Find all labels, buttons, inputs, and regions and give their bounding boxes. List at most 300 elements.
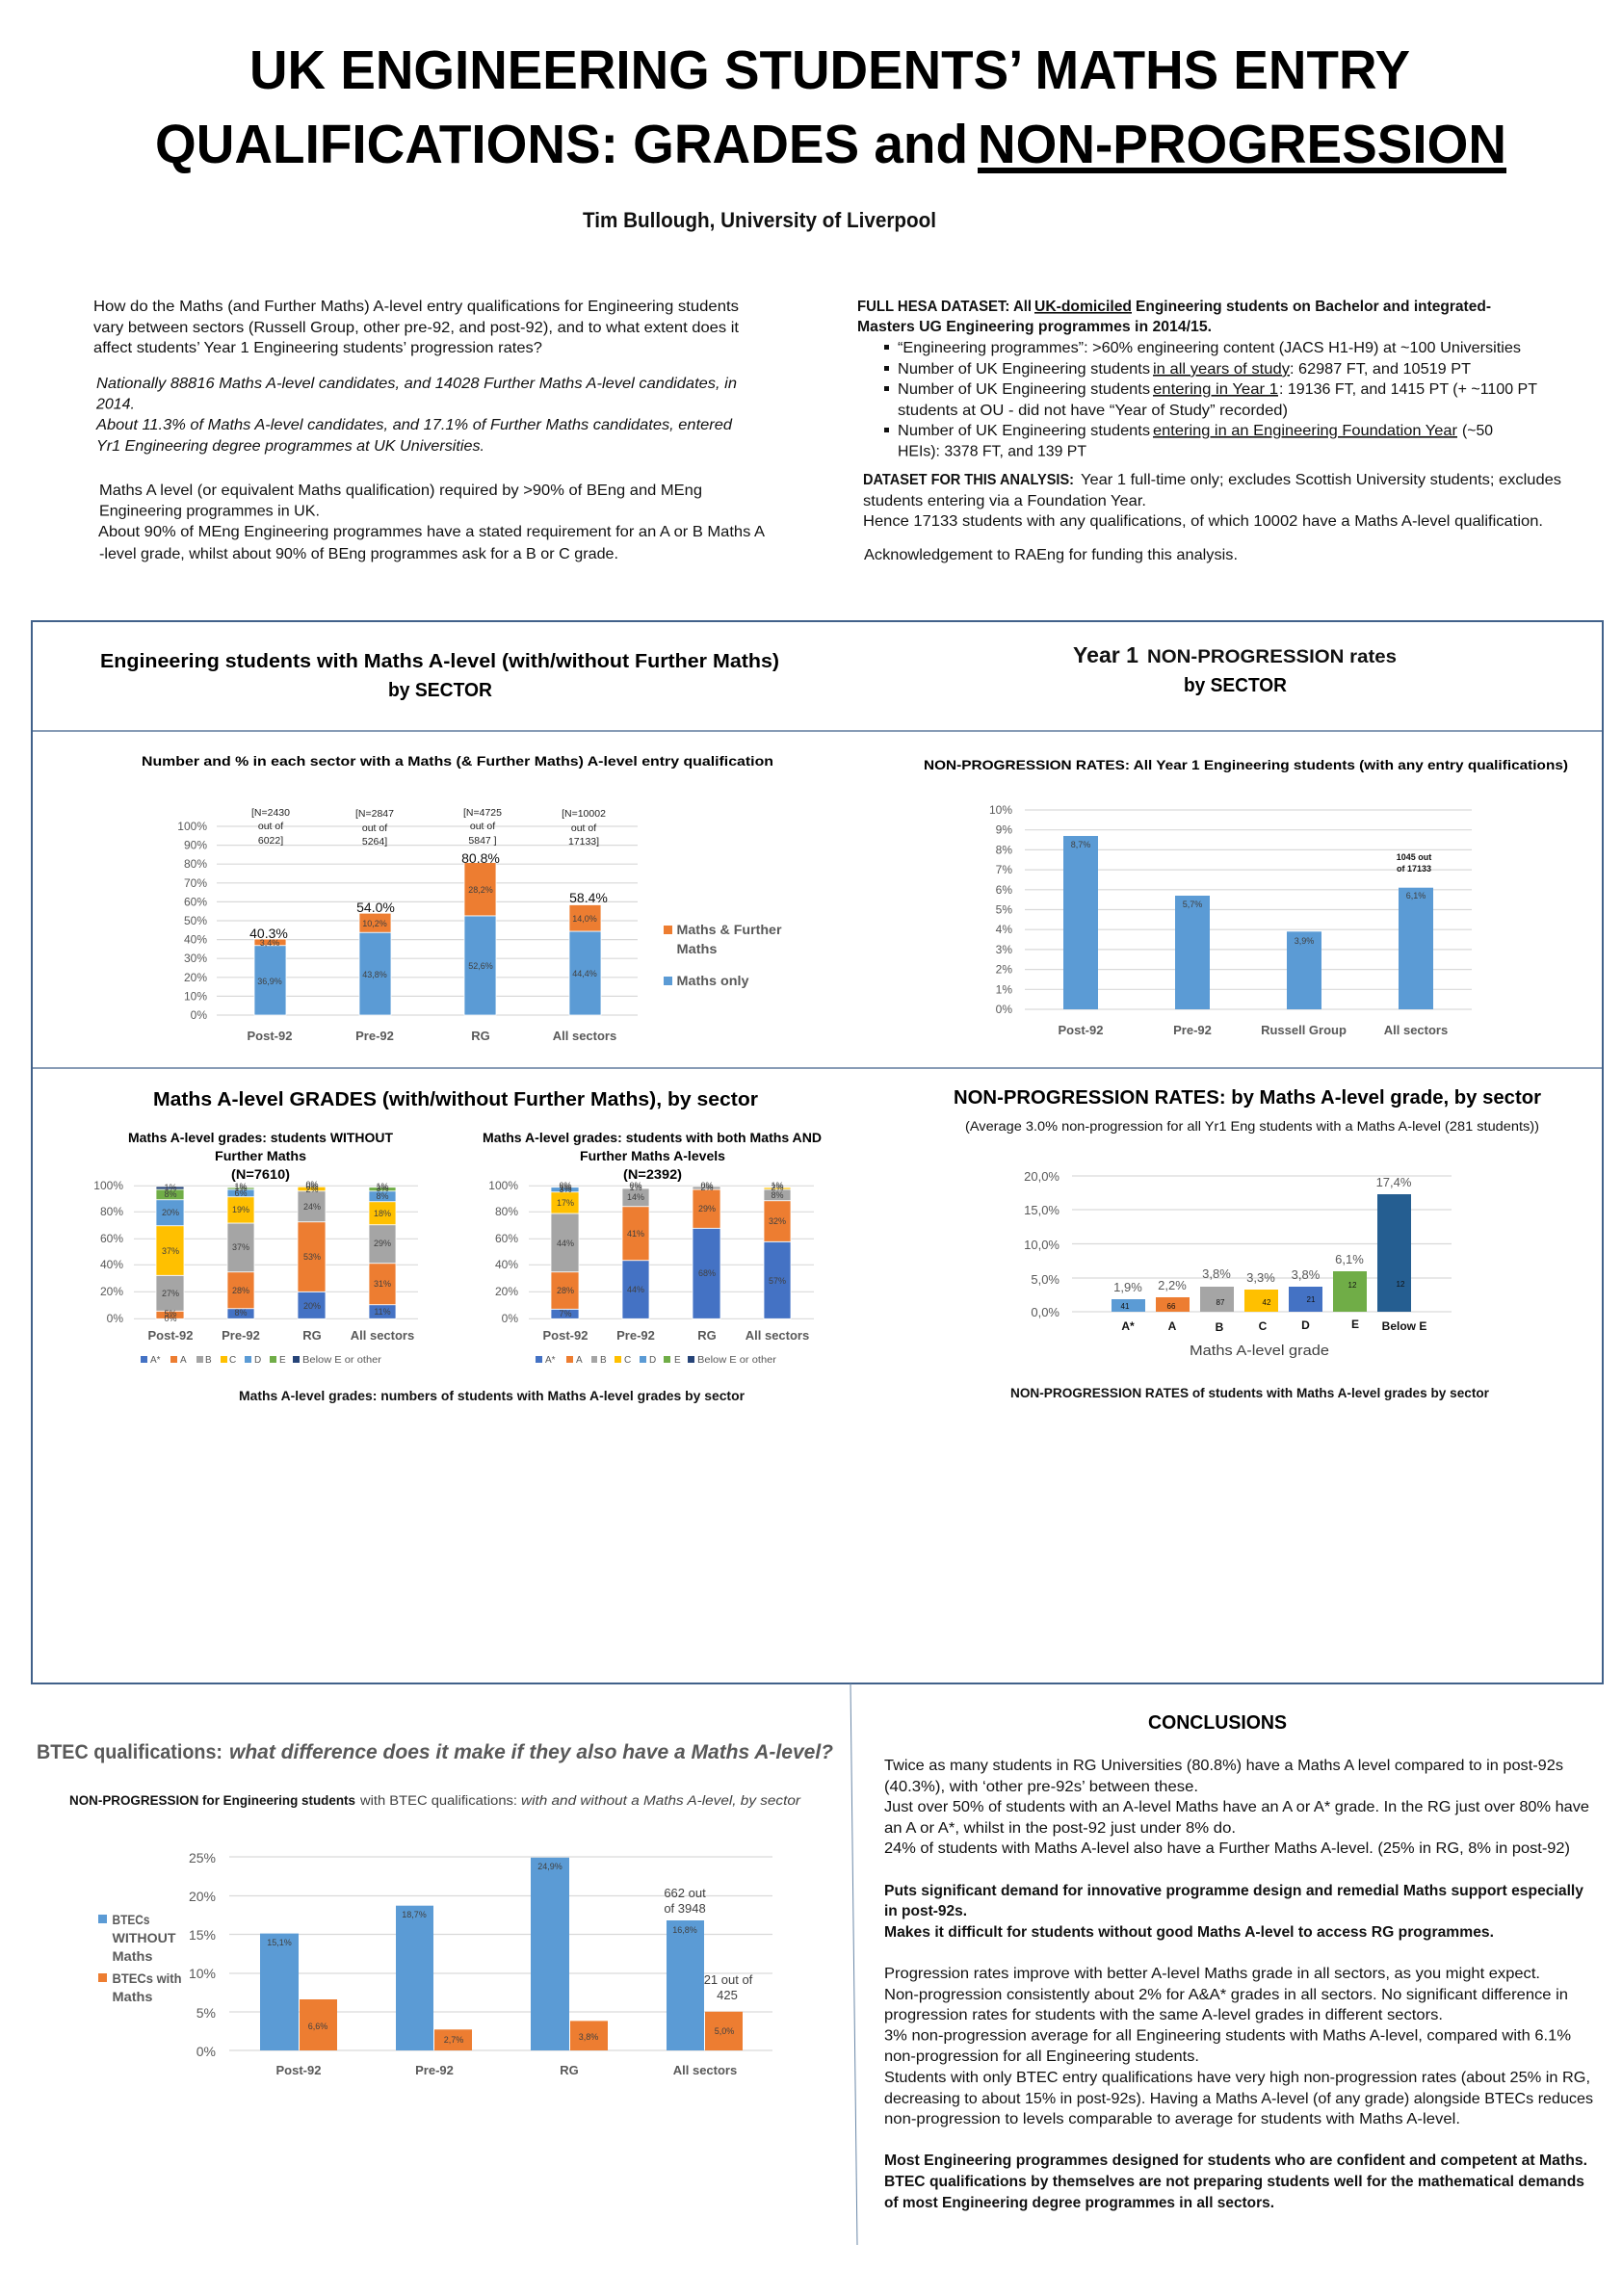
chart: percentage with Maths A-level by sector: 17133] [568,836,599,848]
heading: non-progression by sector: Year 1 [1073,642,1138,667]
chart: grades with Further Maths: 44% [557,1239,574,1248]
chart: non-progression rates by sector: 6,1% [1406,891,1426,900]
chart: percentage with Maths A-level by sector: 28,2% [468,885,493,895]
chart: non-progression by grade: 42 [1263,1298,1271,1307]
chart: grades with Further Maths: 8% [771,1190,784,1200]
text block: research question: How do the Maths (and Further Maths) A-level entry qualifications for Engineering students [93,299,739,315]
chart: percentage with Maths A-level by sector: [N=10002 [562,808,606,820]
chart: grades without Further Maths: 1% [164,1183,177,1192]
chart: grades without Further Maths: All sectors [351,1328,414,1343]
chart: grades without Further Maths: 100% [93,1179,123,1192]
chart: grades without Further Maths: 29% [374,1239,391,1248]
legend: BTEC: Maths [112,1949,152,1964]
chart: percentage with Maths A-level by sector: 43,8% [362,970,387,979]
legend: BTEC: WITHOUT [112,1931,176,1945]
chart: non-progression by grade: C [1259,1319,1268,1333]
legend: Maths only [676,974,749,988]
chart title: students without Further Maths: Further Maths [215,1148,306,1163]
text block: progression findings: Students with only BTEC entry qualifications have very high non-progression rates (about 25% in RG, [884,2070,1590,2086]
chart: percentage with Maths A-level by sector: 54.0% [356,900,395,915]
chart: percentage with Maths A-level by sector: 60% [184,895,207,908]
chart: percentage with Maths A-level by sector: 58.4% [569,890,608,905]
legend: grades, Further Maths chart: B [600,1355,607,1366]
chart: non-progression by grade: Maths A-level grade [1190,1343,1329,1359]
chart: grades with Further Maths: Pre-92 [616,1328,655,1343]
text block: progression findings: 3% non-progression average for all Engineering students with Maths A-level, compared with 6.1% [884,2028,1571,2044]
text block: final message: of most Engineering degree programmes in all sectors. [884,2195,1274,2211]
chart: non-progression by grade: 3,8% [1202,1266,1231,1281]
chart: BTEC non-progression by sector: 3,8% [579,2032,598,2042]
callout: 662 out of 3948: of 3948 [664,1901,706,1916]
chart heading: BTEC non-progression [69,1793,801,1808]
chart: non-progression by grade: 41 [1121,1302,1130,1311]
text block: sector findings: (40.3%), with ‘other pre-92s’ between these. [884,1779,1198,1795]
chart: percentage with Maths A-level by sector: 30% [184,952,207,965]
chart: non-progression by grade: B [1216,1320,1224,1334]
chart: percentage with Maths A-level by sector: 40% [184,933,207,947]
chart: non-progression by grade: 3,3% [1246,1270,1275,1285]
legend: BTEC: BTECs [112,1913,150,1927]
chart: grades with Further Maths: 60% [495,1232,518,1245]
text block: entry requirements: Maths A level (or equivalent Maths qualification) required by >90% of BEng and MEng [99,483,702,499]
chart: percentage with Maths A-level by sector: 70% [184,876,207,890]
chart: BTEC non-progression by sector: All sectors [673,2063,737,2077]
text block: research question: affect students’ Year 1 Engineering students’ progression rates? [93,340,542,356]
chart: non-progression rates by sector: 3,9% [1295,936,1314,946]
chart: grades without Further Maths: 3% [376,1184,389,1193]
chart: grades without Further Maths: 20% [303,1301,321,1311]
callout: 662 out of 3948: 662 out [664,1886,706,1900]
heading: students by sector [100,651,779,701]
chart heading: number and %: Number and % in each sector with a Maths (& Further Maths) A-level entry qualification [142,753,773,769]
chart: grades without Further Maths: 40% [100,1258,123,1271]
chart: percentage with Maths A-level by sector: out of [470,821,495,832]
legend: grades, Further Maths chart: C [624,1355,631,1366]
text block: full HESA dataset: Engineering students on Bachelor and integrated- [1136,299,1491,315]
chart: grades with Further Maths: Post-92 [543,1328,588,1343]
caption: non-progression by grade and sector: NON-PROGRESSION RATES of students with Maths A-level grades by sector [1010,1386,1490,1400]
chart: grades without Further Maths: 53% [303,1252,321,1262]
panel: conclusions [884,1712,1593,2211]
heading: students by sector: Engineering students with Maths A-level (with/without Further Maths) [100,651,779,672]
text block: dataset for this analysis: Hence 17133 students with any qualifications, of which 10002 have a Maths A-level qualification. [863,513,1543,530]
chart: grades with Further Maths: 41% [627,1229,644,1239]
text block: full HESA dataset: (~50 [1462,423,1493,439]
text block: research question [93,299,740,356]
chart: grades with Further Maths: 2% [771,1183,784,1192]
chart: grades without Further Maths: 8% [164,1189,177,1199]
callout: 21 out of 425: 425 [717,1988,738,2002]
text block: full HESA dataset [857,299,1537,460]
chart heading: all year 1 non-progression: NON-PROGRESSION RATES: All Year 1 Engineering students (with any entry qualifications) [924,757,1568,772]
chart: grades without Further Maths: Post-92 [148,1328,193,1343]
legend: grades: D [254,1355,261,1366]
heading: non-progression by grade: NON-PROGRESSION RATES: by Maths A-level grade, by sector [954,1087,1541,1109]
legend: BTEC: Maths [112,1990,152,2004]
chart title: students with Further Maths: (N=2392) [623,1166,682,1182]
chart: percentage with Maths A-level by sector: 6022] [258,835,283,847]
chart: grades without Further Maths: 11% [374,1307,391,1317]
text block: progression findings: progression rates for students with the same A-level grades in different sectors. [884,2007,1443,2023]
chart title: students with Further Maths: Further Maths A-levels [580,1148,725,1163]
chart: grades with Further Maths: 14% [627,1192,644,1202]
chart: grades with Further Maths: 17% [557,1198,574,1208]
heading: BTEC qualifications: what difference does it make if they also have a Maths A-level? [229,1741,833,1763]
chart: grades without Further Maths: 28% [232,1286,249,1295]
chart: percentage with Maths A-level by sector: 90% [184,839,207,852]
chart: percentage with Maths A-level by sector: 20% [184,971,207,984]
legend: Maths & Further [676,923,782,937]
legend: grades: Below E or other [302,1355,382,1366]
chart: percentage with Maths A-level by sector: 5264] [362,836,387,848]
caption: numbers of students: Maths A-level grades: numbers of students with Maths A-level grades by sector [239,1389,746,1403]
chart: non-progression rates by sector [989,803,1472,1037]
chart: grades without Further Maths: 80% [100,1205,123,1218]
text block: entry requirements [98,483,765,562]
author: Tim Bullough, University of Liverpool [583,208,936,232]
chart: grades without Further Maths: 31% [374,1279,391,1289]
chart: grades without Further Maths [93,1179,418,1366]
chart: grades with Further Maths: 3% [559,1185,572,1194]
panel frame: Maths A-level and non-progression charts [32,621,1603,1683]
chart: grades without Further Maths: 37% [232,1242,249,1252]
chart: grades without Further Maths: 18% [374,1209,391,1218]
chart: percentage with Maths A-level by sector: RG [471,1029,490,1043]
chart title: students without Further Maths: Maths A-level grades: students WITHOUT [128,1130,393,1145]
chart: non-progression by grade: 66 [1167,1302,1176,1311]
chart: grades with Further Maths: RG [697,1328,717,1343]
chart: percentage with Maths A-level by sector: 10,2% [362,919,387,928]
chart: grades with Further Maths: 68% [698,1268,716,1278]
chart: percentage with Maths A-level by sector: out of [258,821,283,832]
legend: grades, Further Maths chart: A [576,1355,583,1366]
chart: percentage with Maths A-level by sector: [N=2847 [355,808,394,820]
heading: students by sector: by SECTOR [388,680,493,701]
chart: BTEC non-progression by sector: RG [560,2063,579,2077]
chart: non-progression by grade: 1,9% [1113,1280,1142,1294]
chart: percentage with Maths A-level by sector: 36,9% [257,977,282,986]
chart: grades without Further Maths: 8% [376,1191,389,1201]
chart: non-progression by grade: 17,4% [1376,1175,1412,1189]
chart: grades with Further Maths: 0% [629,1181,642,1190]
chart: non-progression by grade: 21 [1307,1295,1316,1304]
chart: grades without Further Maths: 5% [164,1309,177,1318]
chart: BTEC non-progression by sector: 5,0% [715,2026,734,2036]
title: NON-PROGRESSION [978,114,1506,175]
chart: non-progression rates by sector: 7% [996,863,1012,876]
chart: percentage with Maths A-level by sector: 5847 ] [468,835,497,847]
chart: BTEC non-progression by sector: 15,1% [267,1938,292,1947]
text block: progression findings: non-progression for all Engineering students. [884,2048,1199,2065]
chart: grades with Further Maths: 0% [502,1312,518,1325]
chart: grades with Further Maths: 80% [495,1205,518,1218]
legend [664,923,782,988]
text block: full HESA dataset: Number of UK Engineering students [898,361,1150,378]
chart: BTEC non-progression by sector: 10% [189,1966,216,1981]
text block: full HESA dataset: Masters UG Engineering programmes in 2014/15. [857,319,1212,335]
text block: national candidates: 2014. [95,397,135,412]
chart: non-progression rates by sector: Russell Group [1261,1023,1347,1037]
chart: grades with Further Maths: 40% [495,1258,518,1271]
chart: grades with Further Maths [488,1179,814,1366]
chart: non-progression rates by sector: 0% [996,1003,1012,1016]
chart: non-progression rates by sector: 8,7% [1071,840,1090,849]
chart: non-progression by grade: Below E [1382,1319,1426,1333]
text block: entry requirements: About 90% of MEng Engineering programmes have a stated requirement for an A or B Maths A [98,524,765,540]
text block: full HESA dataset: “Engineering programmes”: >60% engineering content (JACS H1-H9) at ~100 Universities [898,340,1521,356]
chart: grades with Further Maths: 1% [629,1183,642,1192]
chart: BTEC non-progression by sector: 20% [189,1889,216,1904]
chart: non-progression by grade: 10,0% [1024,1238,1060,1252]
chart: non-progression by grade: E [1351,1318,1359,1331]
heading: BTEC qualifications: BTEC qualifications: [37,1741,222,1763]
chart: percentage with Maths A-level by sector: [N=2430 [251,807,290,819]
chart: BTEC non-progression by sector: 5% [196,2005,216,2021]
text block: national candidates: Yr1 Engineering degree programmes at UK Universities. [96,438,484,455]
text block: research question: vary between sectors (Russell Group, other pre-92, and post-92), and to what extent does it [93,320,740,336]
chart: percentage with Maths A-level by sector: out of [571,822,596,834]
chart: grades with Further Maths: 0% [700,1181,714,1190]
chart title: students with Further Maths: Maths A-level grades: students with both Maths AND [483,1130,822,1145]
text block: entry requirements: Engineering programmes in UK. [99,503,320,520]
text block: progression findings [884,1966,1593,2127]
chart: non-progression by grade: 12 [1397,1280,1405,1289]
chart: grades with Further Maths: 100% [488,1179,518,1192]
chart: grades with Further Maths: 7% [559,1309,572,1318]
chart: non-progression by grade: 20,0% [1024,1169,1060,1184]
chart: grades without Further Maths: 37% [162,1246,179,1256]
chart heading: BTEC non-progression: with and without a Maths A-level, by sector [521,1793,801,1808]
text block: progression findings: decreasing to about 15% in post-92s). Having a Maths A-level (of any grade) alongside BTECs reduces [884,2091,1593,2107]
chart: grades without Further Maths: 2% [305,1185,319,1194]
chart: grades with Further Maths: 0% [559,1181,572,1190]
text block: full HESA dataset: entering in an Engineering Foundation Year [1153,423,1458,439]
chart: BTEC non-progression by sector: 25% [189,1850,216,1866]
chart: non-progression by grade: 15,0% [1024,1203,1060,1217]
text block: sector findings: Just over 50% of students with an A-level Maths have an A or A* grade. In the RG just over 80% have [884,1799,1589,1815]
heading: conclusions: CONCLUSIONS [1148,1712,1287,1734]
chart: non-progression by grade: A [1168,1319,1177,1333]
chart: non-progression rates by sector: All sectors [1384,1023,1448,1037]
chart: grades without Further Maths: 0% [305,1180,319,1189]
callout: 662 out of 3948 [664,1886,706,1916]
chart: non-progression by grade: 5,0% [1031,1272,1060,1287]
chart: percentage with Maths A-level by sector: 80.8% [461,850,500,866]
chart: grades without Further Maths: 27% [162,1289,179,1298]
chart: non-progression by grade: A* [1121,1319,1135,1333]
text block: progression findings: Non-progression consistently about 2% for A&A* grades in all sectors. No significant difference in [884,1987,1568,2003]
chart: non-progression by grade: 12 [1348,1281,1357,1290]
text block: progression findings: Progression rates improve with better A-level Maths grade in all sectors, as you might expect. [884,1966,1540,1982]
text block: full HESA dataset: Number of UK Engineering students [898,423,1150,439]
chart: percentage with Maths A-level by sector: All sectors [553,1029,616,1043]
chart: percentage with Maths A-level by sector: 0% [191,1008,207,1022]
chart: grades without Further Maths: 20% [100,1285,123,1298]
chart: grades with Further Maths: 29% [698,1204,716,1213]
text block: full HESA dataset: FULL HESA DATASET: All [857,299,1032,315]
text block: dataset for this analysis: Year 1 full-time only; excludes Scottish University students; excludes [1081,472,1561,488]
chart: grades with Further Maths: 1% [771,1181,784,1190]
chart: grades with Further Maths: 1% [559,1183,572,1192]
chart: non-progression rates by sector: Pre-92 [1173,1023,1212,1037]
chart: grades with Further Maths: All sectors [746,1328,809,1343]
chart: grades with Further Maths: 44% [627,1285,644,1294]
chart: non-progression by grade: D [1301,1318,1310,1332]
chart: grades with Further Maths: 28% [557,1286,574,1295]
text block: dataset for this analysis: students entering via a Foundation Year. [863,493,1146,509]
text block: sector findings: Twice as many students in RG Universities (80.8%) have a Maths A level compared to in post-92s [884,1758,1563,1774]
chart: percentage with Maths A-level by sector: 80% [184,857,207,871]
text block: sector findings: an A or A*, whilst in the post-92 just under 8% do. [884,1820,1236,1837]
text block: full HESA dataset: entering in Year 1 [1153,381,1278,398]
callout: 1045 out of 17133 [1397,852,1431,874]
chart: non-progression rates by sector: 1% [996,982,1012,996]
chart: grades without Further Maths: 24% [303,1202,321,1212]
chart: BTEC non-progression by sector: Post-92 [276,2063,321,2077]
chart: non-progression by grade: 6,1% [1335,1252,1364,1266]
chart: non-progression by grade [1024,1169,1452,1359]
text block: entry requirements: -level grade, whilst about 90% of BEng programmes ask for a B or C grade. [99,546,618,562]
legend: BTEC [98,1913,181,2004]
chart: percentage with Maths A-level by sector: 52,6% [468,961,493,971]
legend: grades [141,1355,382,1366]
acknowledgement: Acknowledgement to RAEng for funding this analysis. [864,547,1238,563]
text block: national candidates [95,376,737,455]
chart: BTEC non-progression by sector [98,1850,772,2077]
chart: percentage with Maths A-level by sector: 50% [184,914,207,927]
chart heading: BTEC non-progression: NON-PROGRESSION for Engineering students [69,1793,355,1808]
chart: non-progression rates by sector: 3% [996,943,1012,956]
heading: non-progression by sector: by SECTOR [1184,675,1288,696]
text block: full HESA dataset: HEIs): 3378 FT, and 139 PT [898,443,1086,460]
callout: 21 out of 425 [704,1972,753,2002]
chart: non-progression rates by sector: Post-92 [1059,1023,1103,1037]
chart: non-progression rates by sector: 5% [996,903,1012,917]
chart: grades without Further Maths: 0% [164,1314,177,1323]
text block: national candidates: Nationally 88816 Maths A-level candidates, and 14028 Further Maths A-level candidates, in [96,376,737,392]
chart: non-progression rates by sector: 4% [996,923,1012,936]
chart: BTEC non-progression by sector: 16,8% [672,1925,697,1935]
legend: Maths [676,942,717,956]
chart: grades without Further Maths: Pre-92 [222,1328,260,1343]
text block: full HESA dataset: UK-domiciled [1034,299,1132,315]
chart: grades with Further Maths: 20% [495,1285,518,1298]
chart heading: BTEC non-progression: with BTEC qualifications: [359,1793,517,1808]
legend: grades: A [180,1355,187,1366]
legend: grades, Further Maths chart: A* [545,1355,556,1366]
legend: grades, Further Maths chart: D [649,1355,656,1366]
chart: percentage with Maths A-level by sector: out of [362,822,387,834]
text block: demand on programmes: Puts significant demand for innovative programme design and remedial Maths support especially [884,1883,1583,1899]
chart: grades without Further Maths: 20% [162,1208,179,1217]
chart: grades without Further Maths: 1% [234,1184,248,1193]
chart: BTEC non-progression by sector: 2,7% [444,2035,463,2045]
chart: BTEC non-progression by sector: Pre-92 [415,2063,454,2077]
legend: grades: C [229,1355,236,1366]
heading: non-progression by sector [1073,642,1397,696]
chart: BTEC non-progression by sector: 15% [189,1927,216,1943]
text block: full HESA dataset: Number of UK Engineering students [898,381,1150,398]
chart: percentage with Maths A-level by sector: 14,0% [572,914,597,924]
text block: demand on programmes: Makes it difficult for students without good Maths A-level to access RG programmes. [884,1924,1494,1941]
chart: percentage with Maths A-level by sector: Post-92 [248,1029,292,1043]
legend: grades, Further Maths chart [536,1355,777,1366]
chart: BTEC non-progression by sector: 6,6% [308,2022,327,2031]
chart: grades without Further Maths: RG [302,1328,322,1343]
chart: percentage with Maths A-level by sector: Pre-92 [355,1029,394,1043]
text block: final message [884,2152,1587,2211]
chart: grades without Further Maths: 60% [100,1232,123,1245]
callout: 1045 out of 17133: of 17133 [1397,864,1431,874]
chart: non-progression rates by sector: 6% [996,883,1012,897]
title: UK ENGINEERING STUDENTS’ MATHS ENTRY [249,39,1410,101]
chart: percentage with Maths A-level by sector [177,807,782,1043]
chart: percentage with Maths A-level by sector: 3,4% [260,938,279,948]
legend: BTEC: BTECs with [112,1971,181,1986]
text block: dataset for this analysis: DATASET FOR THIS ANALYSIS: [863,472,1074,488]
chart: grades without Further Maths: 1% [376,1182,389,1191]
chart: percentage with Maths A-level by sector: 10% [184,989,207,1003]
chart: non-progression by grade: 3,8% [1292,1267,1321,1282]
note: average non-progression: (Average 3.0% non-progression for all Yr1 Eng students with a Maths A-level (281 students)) [965,1118,1539,1134]
callout: 1045 out of 17133: 1045 out [1397,852,1431,862]
chart: non-progression rates by sector: 9% [996,823,1012,837]
text block: full HESA dataset: : 19136 FT, and 1415 PT (+ ~1100 PT [1279,381,1537,398]
title: QUALIFICATIONS: GRADES and [155,114,968,175]
chart: BTEC non-progression by sector: 0% [196,2044,216,2059]
text block: final message: Most Engineering programmes designed for students who are confident and competent at Maths. [884,2152,1587,2169]
text block: dataset for this analysis [863,472,1561,530]
chart title: students with Further Maths [483,1130,822,1182]
chart: grades with Further Maths: 32% [769,1216,786,1226]
chart: grades without Further Maths: 8% [234,1308,248,1318]
legend: grades: A* [150,1355,161,1366]
chart: percentage with Maths A-level by sector: [N=4725 [463,807,502,819]
chart: BTEC non-progression by sector: 18,7% [402,1910,427,1919]
text block: full HESA dataset: students at OU - did not have “Year of Study” recorded) [898,403,1288,419]
chart: grades without Further Maths: 19% [232,1205,249,1214]
legend: grades: B [205,1355,212,1366]
text block: demand on programmes: in post-92s. [884,1903,967,1919]
chart: grades with Further Maths: 57% [769,1276,786,1286]
chart: grades with Further Maths: 2% [700,1183,714,1192]
chart: grades without Further Maths: 1% [234,1182,248,1191]
heading: non-progression by sector: NON-PROGRESSION rates [1147,646,1397,667]
chart: percentage with Maths A-level by sector: 40.3% [249,926,288,941]
text block: final message: BTEC qualifications by themselves are not preparing students well for the mathematical demands [884,2174,1584,2190]
chart: percentage with Maths A-level by sector: 100% [177,820,207,833]
text block: progression findings: non-progression to levels comparable to average for students with Maths A-level. [884,2111,1460,2127]
text block: national candidates: About 11.3% of Maths A-level candidates, and 17.1% of Further Maths candidates, entered [95,417,733,433]
chart: grades without Further Maths: 0% [305,1182,319,1191]
chart: grades without Further Maths: 0% [107,1312,123,1325]
chart: grades without Further Maths: 6% [234,1188,248,1198]
chart: non-progression rates by sector: 10% [989,803,1012,817]
legend: grades, Further Maths chart: Below E or other [697,1355,777,1366]
chart: non-progression by grade: 0,0% [1031,1305,1060,1319]
text block: full HESA dataset: in all years of study [1153,361,1290,378]
chart: percentage with Maths A-level by sector: 44,4% [572,969,597,978]
heading: Maths A-level grades: Maths A-level GRADES (with/without Further Maths), by sector [153,1089,758,1110]
legend: grades, Further Maths chart: E [674,1355,681,1366]
text block: sector findings: 24% of students with Maths A-level also have a Further Maths A-level. (25% in RG, 8% in post-92) [884,1840,1570,1857]
chart: non-progression rates by sector: 8% [996,843,1012,856]
chart: non-progression rates by sector: 2% [996,963,1012,977]
chart: non-progression by grade: 87 [1216,1298,1225,1307]
chart title: students without Further Maths: (N=7610) [231,1166,290,1182]
title [155,39,1506,175]
text block: demand on programmes [884,1883,1583,1941]
